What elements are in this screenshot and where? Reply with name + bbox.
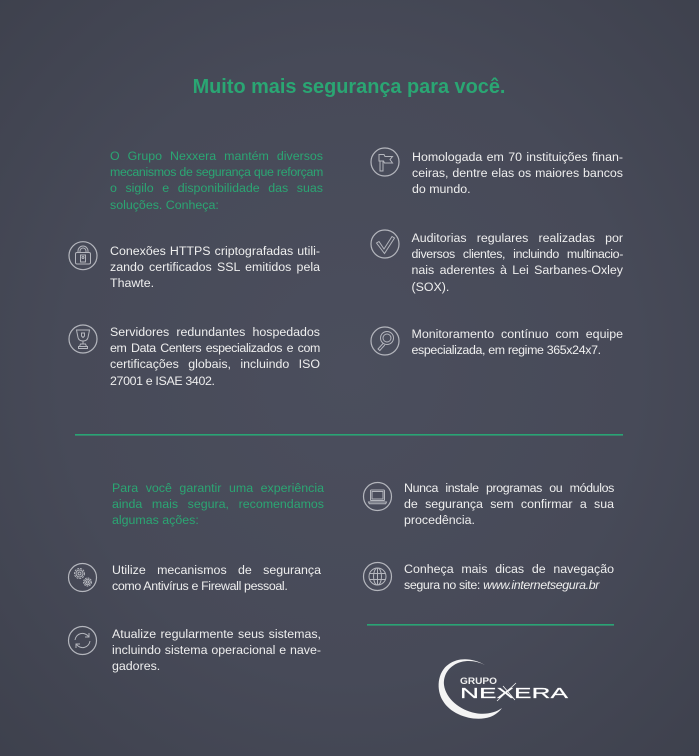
- text: safe browsing tips: Conheça mais dicas de navegação: [404, 562, 614, 576]
- text: HTTPS connections: Conexões HTTPS criptografadas utili-: [110, 244, 320, 258]
- text: update systems: [112, 627, 321, 673]
- icon: globe: [362, 562, 392, 592]
- text: safe browsing tips: segura no site: www.internetsegura.br: [404, 578, 599, 592]
- logo name: NEXERA: [460, 685, 568, 702]
- intro text: recommended actions: algumas ações:: [112, 513, 199, 527]
- intro text: security mechanisms: o sigilo e disponibilidade das suas: [110, 181, 323, 195]
- text: redundant servers: em Data Centers especializados e com: [110, 341, 320, 355]
- text: approved by institutions: do mundo.: [412, 182, 471, 196]
- title: Muito mais segurança para você.: [193, 76, 505, 98]
- intro text: security mechanisms: mecanismos de segurança que reforçam: [110, 165, 323, 179]
- icon: flag: [370, 147, 400, 177]
- intro text: security mechanisms: [110, 149, 323, 212]
- intro text: recommended actions: Para você garantir uma experiência: [112, 481, 324, 495]
- icon: padlock: [68, 241, 98, 270]
- text: redundant servers: Servidores redundantes hospedados: [110, 325, 320, 339]
- text: antivirus and firewall: como Antivírus e Firewall pessoal.: [112, 579, 287, 593]
- logo: Grupo Nexxera: [438, 659, 568, 719]
- text: regular audits: diversos clientes, incluindo multinacio-: [412, 247, 623, 261]
- icon: check mark: [370, 229, 400, 259]
- icon: refresh arrows: [68, 626, 98, 656]
- text: redundant servers: [110, 325, 320, 388]
- text: safe browsing tips: [404, 562, 614, 592]
- text: regular audits: Auditorias regulares realizadas por: [412, 231, 623, 245]
- logo crescent: [439, 659, 502, 719]
- text: never install modules: procedência.: [404, 513, 475, 527]
- text: antivirus and firewall: [112, 563, 322, 593]
- text: regular audits: (SOX).: [412, 280, 449, 294]
- text: HTTPS connections: Thawte.: [110, 276, 154, 290]
- logo star accent: [497, 683, 516, 701]
- icon: magnifier: [370, 326, 400, 356]
- text: regular audits: [412, 231, 623, 294]
- text: update systems: incluindo sistema operacional e nave-: [112, 643, 321, 657]
- text: update systems: Atualize regularmente seus sistemas,: [112, 627, 321, 641]
- text: redundant servers: certificações globais, incluindo ISO: [110, 357, 320, 371]
- intro text: security mechanisms: soluções. Conheça:: [110, 198, 219, 212]
- text: redundant servers: 27001 e ISAE 3402.: [110, 374, 215, 388]
- logo small text: GRUPO: [460, 676, 497, 687]
- text: approved by institutions: [412, 150, 623, 196]
- text: HTTPS connections: zando certificados SSL emitidos pela: [110, 260, 320, 274]
- text: continuous monitoring: Monitoramento contínuo com equipe: [412, 327, 623, 341]
- intro text: recommended actions: [112, 481, 324, 527]
- text: never install modules: [404, 481, 614, 527]
- text: never install modules: de segurança sem confirmar a sua: [404, 497, 614, 511]
- text: approved by institutions: ceiras, dentre elas os maiores bancos: [412, 166, 623, 180]
- text: never install modules: Nunca instale programas ou módulos: [404, 481, 614, 495]
- text: HTTPS connections: [110, 244, 320, 290]
- text: antivirus and firewall: Utilize mecanismos de segurança: [112, 563, 321, 577]
- text: continuous monitoring: [412, 327, 623, 357]
- text: approved by institutions: Homologada em 70 instituições finan-: [412, 150, 623, 164]
- icon: gears: [68, 562, 98, 592]
- icon: trophy: [68, 324, 98, 354]
- text: continuous monitoring: especializada, em regime 365x24x7.: [412, 343, 601, 357]
- icon: laptop: [362, 482, 392, 512]
- text: update systems: gadores.: [112, 659, 160, 673]
- intro text: recommended actions: ainda mais segura, recomendamos: [112, 497, 324, 511]
- text: regular audits: nais aderentes à Lei Sarbanes-Oxley: [412, 263, 623, 277]
- intro text: security mechanisms: O Grupo Nexxera mantém diversos: [110, 149, 323, 163]
